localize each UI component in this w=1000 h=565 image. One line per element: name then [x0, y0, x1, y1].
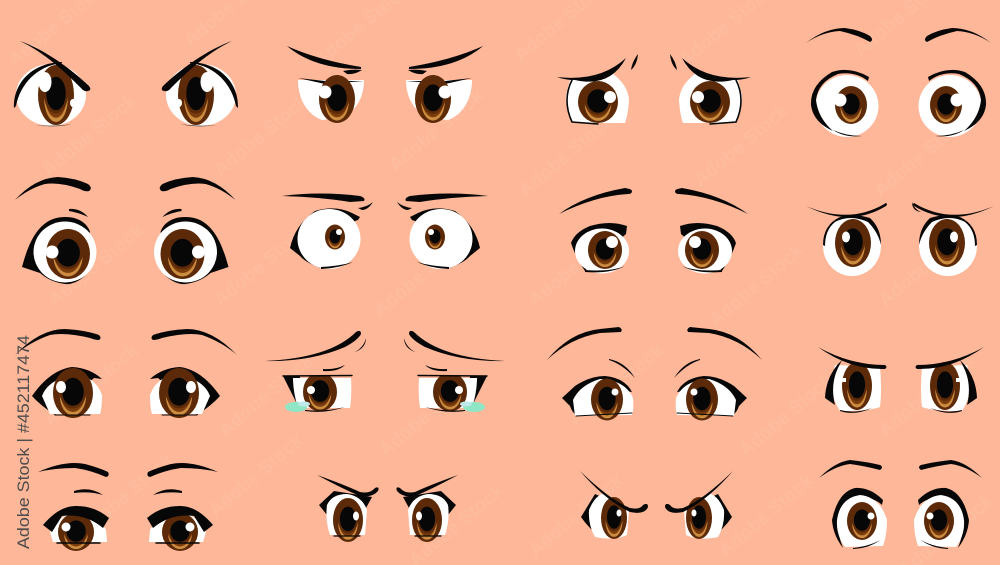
watermark pattern: Adobe Stock: [40, 340, 143, 431]
eye pair row 4 column 2: right eye: [396, 475, 458, 542]
eye pair row 4 column 3: right eye: [665, 471, 733, 539]
eye pair row 4 column 2: left eye: [317, 475, 379, 542]
eye pair row 2 column 2: left eye: [282, 194, 373, 269]
watermark pattern: Adobe Stock: [385, 85, 488, 176]
eye pair row 1 column 3: left eye: [557, 54, 638, 124]
eye pair row 2 column 1: right eye: [154, 177, 236, 284]
eye pair row 4 column 4: right eye: [914, 460, 982, 549]
watermark pattern: Adobe Stock: [210, 90, 313, 181]
eye pair row 1 column 2: left eye: [287, 46, 364, 123]
eye pair row 1 column 1: right eye: [162, 41, 238, 126]
eye pair row 3 column 2: right eye with tear: [404, 331, 505, 412]
watermark pattern: Adobe Stock: [210, 220, 313, 311]
eye pair row 3 column 1: right eye: [150, 329, 237, 418]
eye pair row 3 column 2: left eye with tear: [265, 331, 366, 412]
stock id side label: Adobe Stock | #452117474: [14, 335, 33, 549]
eye pair row 4 column 1: left eye: [38, 463, 109, 551]
eye pair row 2 column 4: left eye: [806, 203, 887, 276]
eye pair row 1 column 4: right eye: [918, 28, 991, 137]
eye pair row 2 column 1: left eye: [15, 177, 96, 284]
eye pair row 2 column 2: right eye: [397, 194, 488, 269]
eye pair row 4 column 1: right eye: [147, 463, 218, 551]
watermark pattern: Adobe Stock: [875, 220, 978, 311]
eye pair row 2 column 3: right eye: [675, 188, 748, 274]
watermark pattern: Adobe Stock: [875, 350, 978, 441]
eye pair row 1 column 4: left eye: [806, 28, 878, 137]
watermark pattern: Adobe Stock: [370, 230, 473, 321]
watermark pattern: Adobe Stock: [75, 450, 178, 541]
watermark pattern: Adobe Stock: [45, 220, 148, 311]
watermark pattern: Adobe Stock: [705, 240, 808, 331]
watermark pattern: Adobe Stock: [870, 110, 973, 201]
eye pair row 4 column 4: left eye: [819, 460, 887, 549]
right eye crease: [912, 202, 921, 212]
eye pair row 1 column 2: right eye: [406, 46, 483, 123]
eye pair row 2 column 4: right eye: [913, 203, 994, 276]
eye pair row 3 column 4: right eye: [916, 347, 984, 413]
watermark pattern: Adobe Stock: [690, 100, 793, 191]
watermark pattern: Adobe Stock: [735, 370, 838, 461]
watermark pattern: Adobe Stock: [38, 90, 141, 181]
eye pair row 3 column 3: right eye: [674, 327, 762, 420]
eye pair row 3 column 3: left eye: [547, 327, 635, 420]
watermark pattern: Adobe Stock: [525, 220, 628, 311]
watermark pattern: Adobe Stock: [525, 470, 628, 561]
eye pair row 2 column 3: left eye: [559, 188, 632, 274]
watermark pattern: Adobe Stock: [565, 340, 668, 431]
watermark pattern: Adobe Stock: [515, 110, 618, 201]
eye pair row 3 column 1: left eye: [15, 329, 102, 418]
eye pair row 3 column 4: left eye: [818, 347, 886, 413]
watermark pattern: Adobe Stock: [715, 470, 818, 561]
eye pair row 1 column 1: left eye: [14, 41, 90, 126]
watermark pattern: Adobe Stock: [205, 430, 308, 521]
watermark pattern: Adobe Stock: [375, 370, 478, 461]
watermark pattern: Adobe Stock: [215, 350, 318, 441]
eye pair row 4 column 3: left eye: [580, 471, 648, 539]
eye pair row 1 column 3: right eye: [670, 54, 751, 124]
